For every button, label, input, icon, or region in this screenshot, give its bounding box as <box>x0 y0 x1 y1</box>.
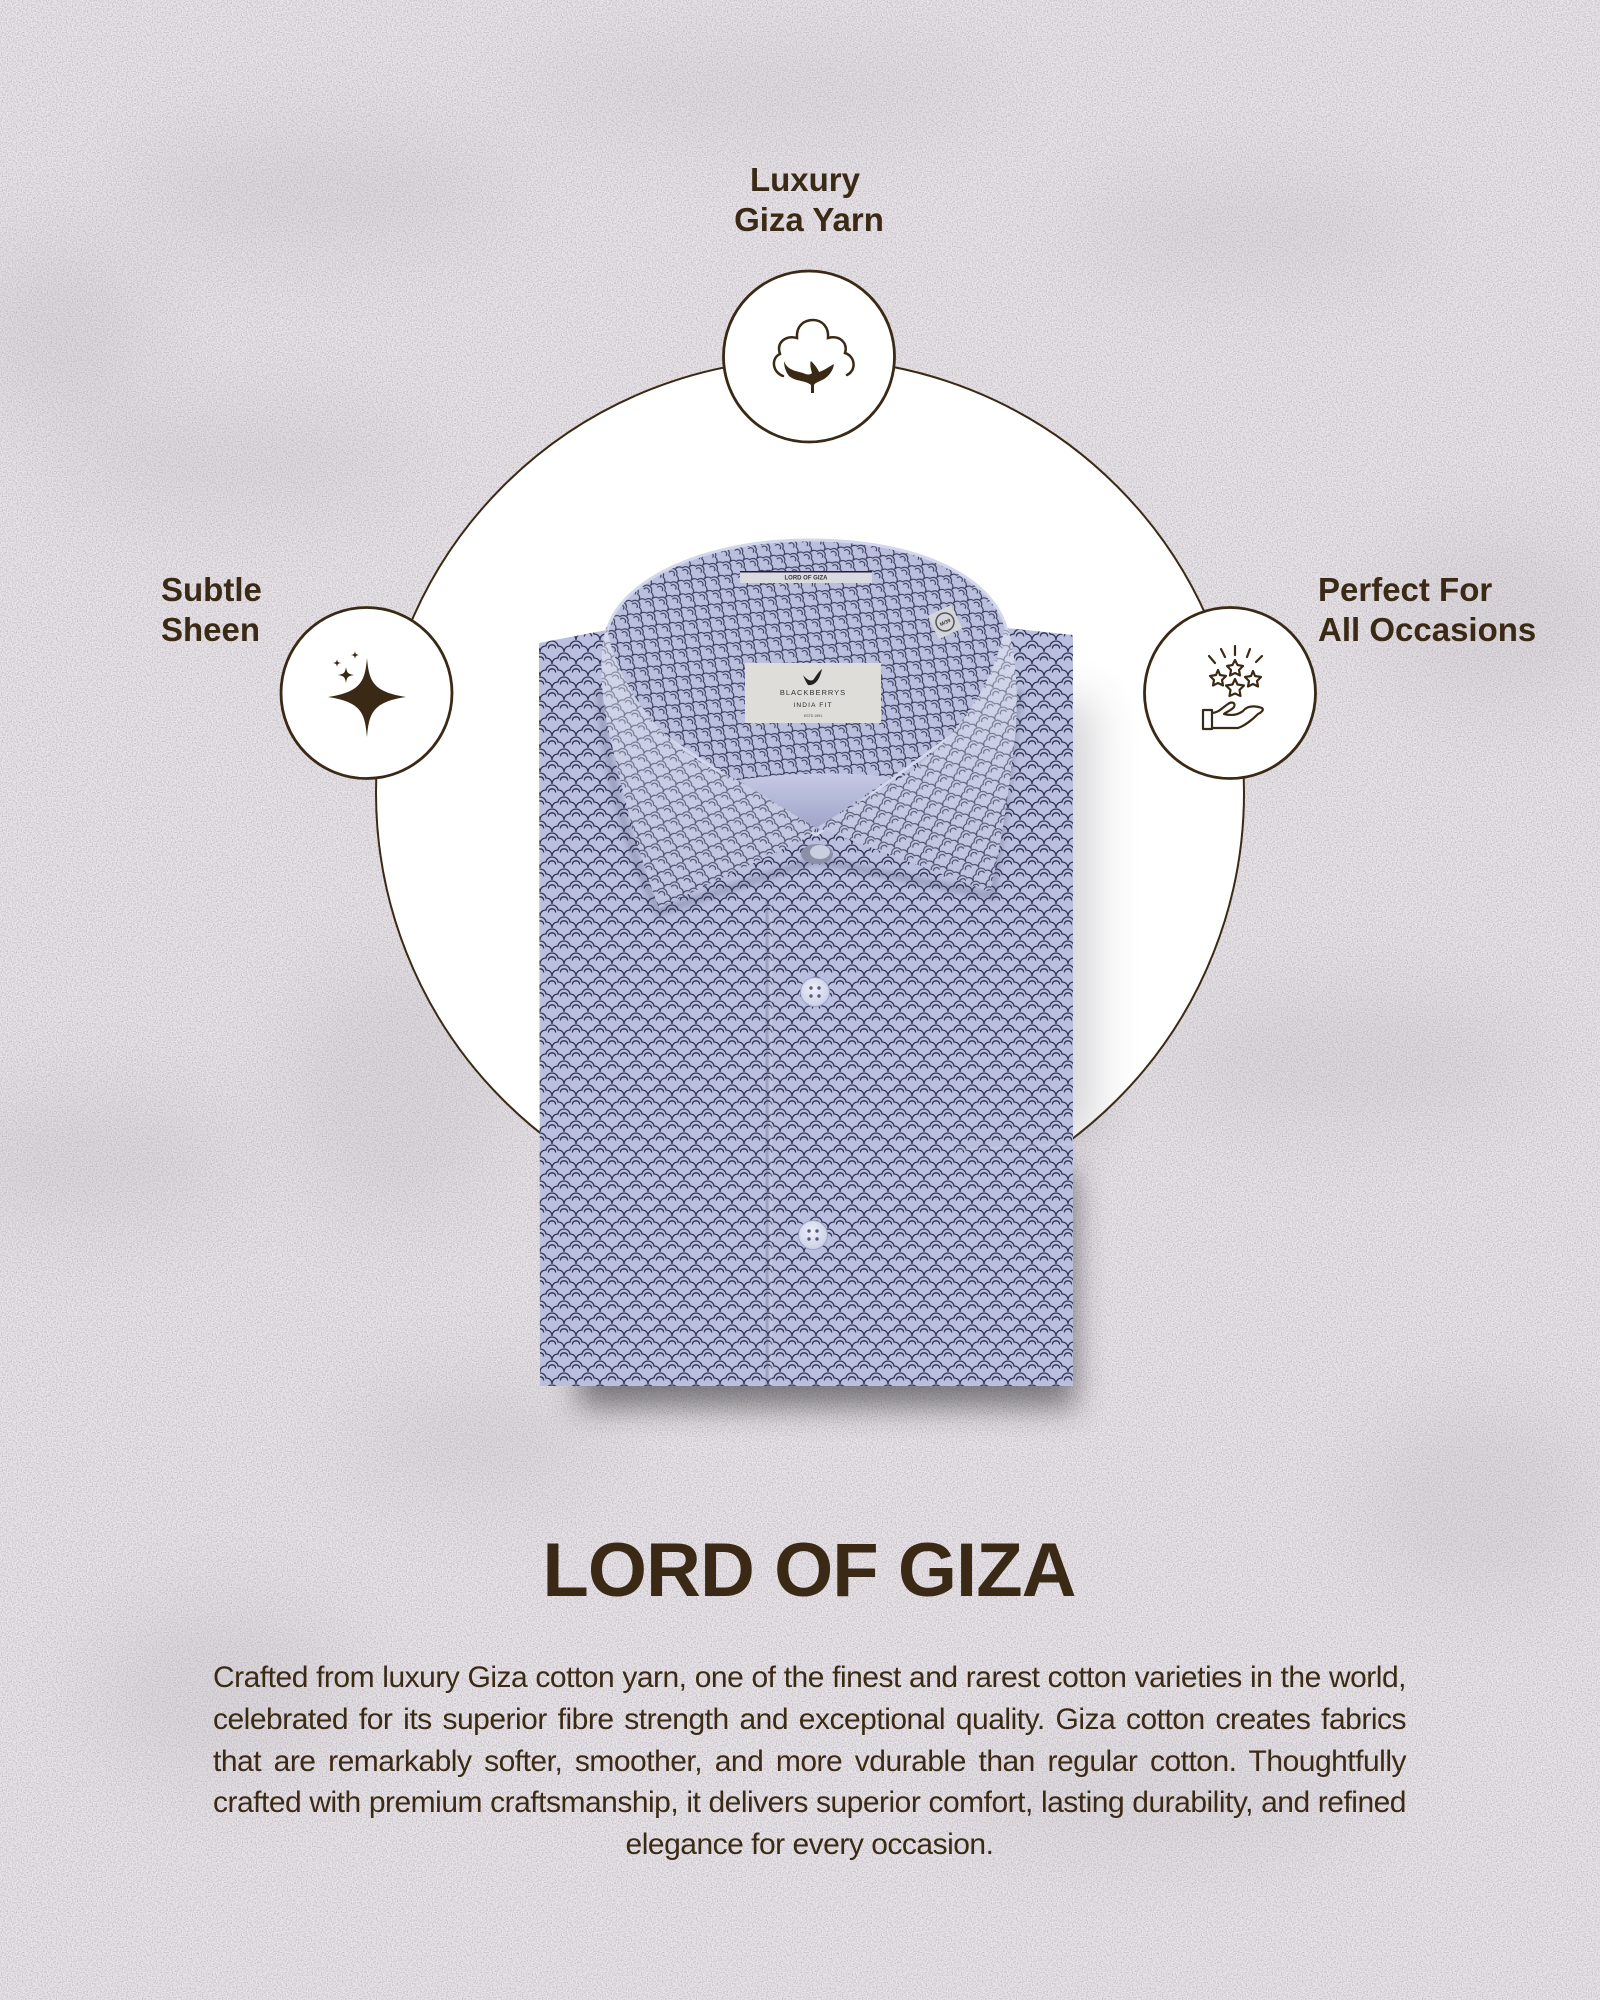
label: Perfect For All Occasions <box>1318 571 1536 648</box>
label: Perfect For All Occasions: All Occasions <box>1318 611 1536 648</box>
shirt <box>539 540 1095 1408</box>
description paragraph: that are remarkably softer, smoother, and more vdurable than regular cotton. Thoughtfully <box>213 1745 1406 1778</box>
label: Perfect For All Occasions: Perfect For <box>1318 571 1492 608</box>
collar shadow on body <box>600 690 1020 912</box>
brand label <box>745 663 881 723</box>
button 3 <box>798 1220 828 1250</box>
brand label: INDIA FIT <box>793 702 833 709</box>
brand label: ESTD 1991 <box>804 714 822 718</box>
description paragraph: Crafted from luxury Giza cotton yarn, one of the finest and rarest cotton varieties in the world, <box>213 1661 1406 1694</box>
large white circle <box>376 359 1244 1227</box>
label: Subtle Sheen: Subtle <box>161 571 262 608</box>
icon: cotton boll <box>774 320 854 393</box>
icon badge: hand with stars <box>1144 608 1316 778</box>
description paragraph <box>213 1661 1406 1861</box>
left collar leaf <box>601 625 816 908</box>
description paragraph: celebrated for its superior fibre strength and exceptional quality. Giza cotton creates fabrics <box>213 1703 1406 1736</box>
shirt drop shadow <box>578 700 1095 1408</box>
description paragraph: elegance for every occasion. <box>626 1828 993 1861</box>
icon badge: sparkle <box>281 608 452 778</box>
collar interior <box>606 540 1008 835</box>
placket edge <box>766 900 771 1386</box>
neck tape label: LORD OF GIZA <box>784 576 828 582</box>
neck tape label <box>740 571 872 583</box>
size sticker: M/39 <box>939 618 952 628</box>
right collar leaf <box>816 623 1017 892</box>
title: LORD OF GIZA <box>542 1528 1076 1613</box>
label: Luxury Giza Yarn: Luxury <box>750 161 860 198</box>
brand label: BLACKBERRYS <box>780 688 846 697</box>
size sticker <box>928 605 962 639</box>
label: Subtle Sheen: Sheen <box>161 611 260 648</box>
button 2 <box>800 978 830 1006</box>
label: Luxury Giza Yarn <box>734 161 884 238</box>
shirt body <box>539 628 1073 1386</box>
description paragraph: crafted with premium craftsmanship, it delivers superior comfort, lasting durability, and refined <box>213 1786 1406 1819</box>
icon: sparkle stars <box>328 651 406 737</box>
label: Subtle Sheen <box>161 571 262 648</box>
icon: hand holding stars <box>1203 646 1263 729</box>
icon badge: cotton <box>724 271 894 442</box>
pocket edge <box>955 1144 1073 1150</box>
inner neck fabric <box>738 774 891 829</box>
collar button <box>801 844 833 864</box>
label: Luxury Giza Yarn: Giza Yarn <box>734 201 884 238</box>
